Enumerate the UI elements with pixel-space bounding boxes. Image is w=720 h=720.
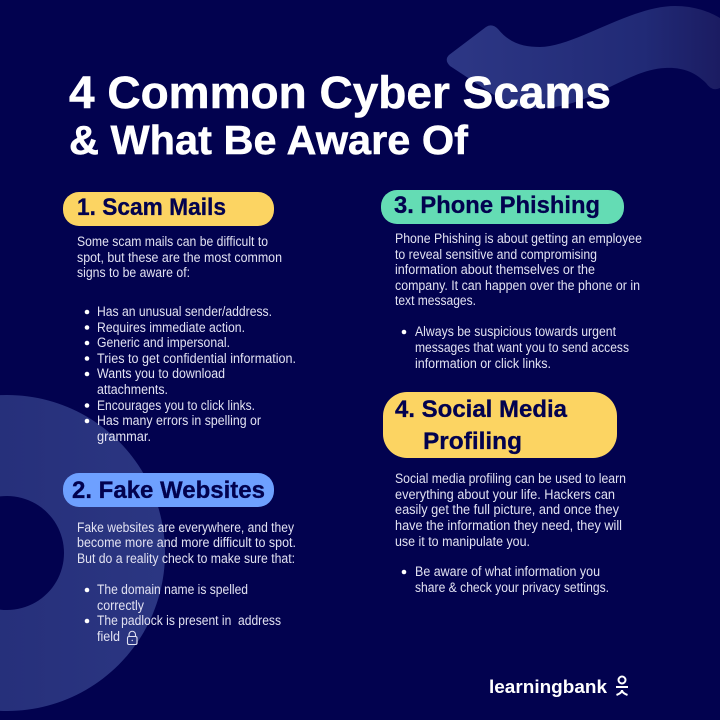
text block: social media intro: Social media profiling can be used to learn — [395, 471, 626, 486]
text block: scam mails intro: spot, but these are the most common — [77, 250, 282, 265]
title: & What Be Aware Of — [69, 117, 468, 163]
text block: phone phishing intro: information about themselves or the — [395, 262, 595, 277]
text block: scam mails intro — [77, 234, 282, 280]
list: reality checks: The domain name is spelled — [97, 582, 248, 597]
list: scam mail signs: Has many errors in spelling or — [97, 413, 261, 428]
title: 4 Common Cyber Scams — [69, 67, 611, 118]
list: scam mail signs: Has an unusual sender/address. — [97, 304, 272, 319]
panel: phone phishing — [381, 190, 642, 371]
decorative arrow shape — [447, 6, 720, 108]
list: scam mail signs: Encourages you to click links. — [97, 398, 255, 413]
heading: 2. Fake Websites: 2. Fake Websites — [72, 477, 265, 504]
text block: phone phishing intro: text messages. — [395, 293, 476, 308]
icon: padlock — [128, 631, 137, 644]
list: reality checks: The padlock is present in address — [97, 613, 281, 628]
text block: phone phishing intro: to reveal sensitive and compromising — [395, 247, 597, 262]
text block: social media intro: easily get the full picture, and once they — [395, 502, 619, 517]
heading: 3. Phone Phishing — [381, 190, 624, 224]
list: phone phishing advice — [402, 324, 629, 371]
list: reality checks: field — [97, 629, 120, 644]
heading: 4. Social Media Profiling: 4. Social Media — [395, 396, 568, 423]
text block: fake websites intro — [77, 520, 296, 566]
list: scam mail signs: Wants you to download — [97, 366, 225, 381]
logo: learningbank: learningbank — [489, 677, 608, 697]
list: reality checks: correctly — [97, 598, 144, 613]
heading: 1. Scam Mails — [63, 192, 274, 226]
list: phone phishing advice: Always be suspicious towards urgent — [415, 324, 616, 339]
title — [69, 67, 611, 163]
list: phone phishing advice: information or click links. — [415, 356, 551, 371]
list: reality checks — [85, 582, 281, 644]
list: social media advice: Be aware of what information you — [415, 564, 600, 579]
list: scam mail signs: attachments. — [97, 382, 168, 397]
heading: 4. Social Media Profiling: Profiling — [423, 428, 522, 455]
text block: scam mails intro: Some scam mails can be difficult to — [77, 234, 268, 249]
list: scam mail signs: Generic and impersonal. — [97, 335, 230, 350]
text block: fake websites intro: Fake websites are everywhere, and they — [77, 520, 294, 535]
panel: fake websites — [63, 473, 296, 644]
list: social media advice — [402, 564, 609, 595]
heading: 1. Scam Mails: 1. Scam Mails — [77, 194, 226, 221]
text block: social media intro: have the information they need, they will — [395, 518, 622, 533]
decorative ring — [0, 395, 165, 711]
icon: learningbank person mark — [616, 676, 628, 695]
text block: scam mails intro: signs to be aware of: — [77, 265, 190, 280]
text block: phone phishing intro: company. It can happen over the phone or in — [395, 278, 640, 293]
list: phone phishing advice: messages that want you to send access — [415, 340, 629, 355]
text block: social media intro: everything about your life. Hackers can — [395, 487, 615, 502]
text block: fake websites intro: But do a reality check to make sure that: — [77, 551, 295, 566]
list: scam mail signs — [85, 304, 296, 444]
text block: social media intro — [395, 471, 626, 549]
text block: phone phishing intro: Phone Phishing is about getting an employee — [395, 231, 642, 246]
heading: 3. Phone Phishing: 3. Phone Phishing — [394, 192, 600, 219]
text block: fake websites intro: become more and more difficult to spot. — [77, 535, 296, 550]
panel: scam mails — [63, 192, 296, 444]
text block: social media intro: use it to manipulate you. — [395, 534, 530, 549]
list: scam mail signs: grammar. — [97, 429, 151, 444]
list: scam mail signs: Tries to get confidential information. — [97, 351, 296, 366]
heading: 4. Social Media Profiling — [383, 392, 617, 458]
panel: social media profiling — [383, 392, 626, 595]
list: scam mail signs: Requires immediate action. — [97, 320, 245, 335]
text block: phone phishing intro — [395, 231, 642, 308]
list: social media advice: share & check your privacy settings. — [415, 580, 609, 595]
